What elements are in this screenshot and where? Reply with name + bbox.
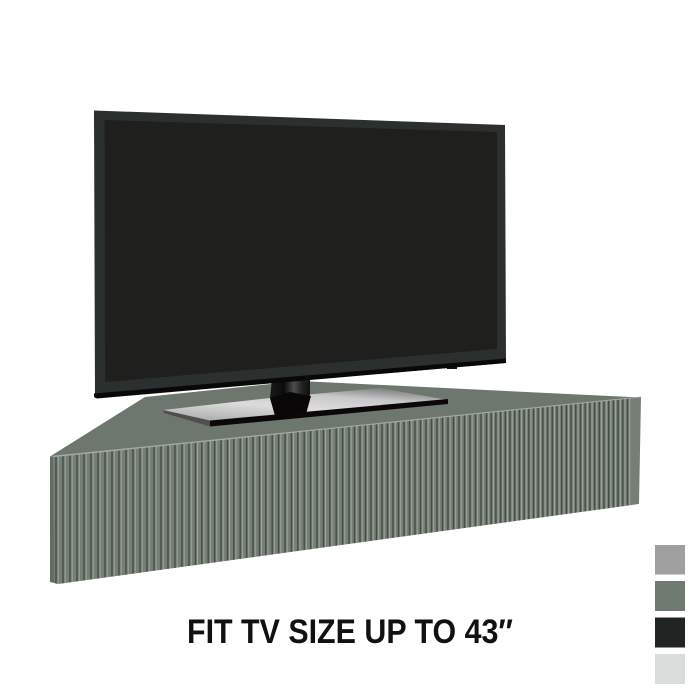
colour swatches [655,545,685,684]
swatch: black [655,618,685,648]
tv outer frame [94,110,506,398]
tv screen [104,120,497,382]
swatch: light grey [655,654,685,684]
tv foot [447,366,457,369]
corner TV cabinet [45,380,645,600]
tv bottom lip [94,358,506,398]
swatch: sage green [655,581,685,611]
cabinet left end post [50,456,54,582]
tv stand neck [270,378,311,419]
cabinet fluted front [50,398,641,584]
swatch: grey [655,545,685,574]
television [94,110,506,426]
caption: fit TV size: FIT TV SIZE UP TO 43″ [187,613,513,651]
tv stand base [163,388,448,426]
cabinet top edge highlight [50,396,641,458]
cabinet top surface [50,381,641,456]
infographic canvas [50,110,685,684]
